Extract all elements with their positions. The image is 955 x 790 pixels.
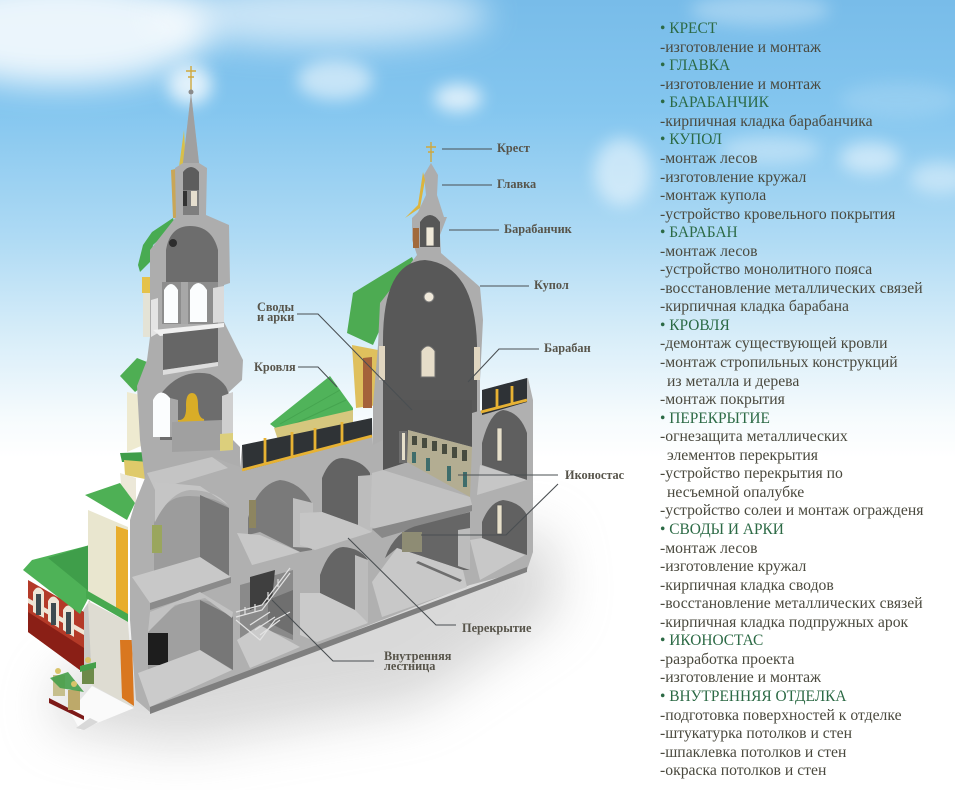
section: перекрытие: -огнезащита металлических [660, 428, 848, 445]
callout: кровля [254, 360, 337, 387]
section: купол [660, 131, 895, 223]
entrance steps and gate [49, 657, 134, 730]
annex windows [33, 588, 74, 637]
callout: барабанчик: Барабанчик [504, 222, 573, 236]
section: своды и арки: -изготовление кружал [660, 558, 806, 575]
section: кровля: -монтаж стропильных конструкций [660, 354, 898, 371]
section wall mass [130, 378, 533, 712]
section: перекрытие [660, 410, 924, 519]
dome grey shell [373, 163, 483, 445]
top room 3 [322, 458, 370, 527]
callout: внутренняя лестница [272, 600, 452, 673]
callout: иконостас: Иконостас [565, 468, 625, 482]
callout: барабанчик [449, 222, 573, 236]
yellow trusses [242, 386, 527, 470]
tower section walls [137, 93, 243, 480]
section: перекрытие: элементов перекрытия [667, 447, 818, 464]
section: иконостас: -разработка проекта [660, 651, 794, 668]
callout: барабан: Барабан [544, 341, 591, 355]
top room 1 [154, 496, 229, 583]
callout: своды и арки [257, 300, 412, 410]
section: перекрытие: несъемной опалубке [667, 484, 804, 501]
church section body [85, 378, 533, 714]
section: купол: -изготовление кружал [660, 169, 806, 186]
bell tier base [172, 420, 222, 452]
ground room 1 [148, 600, 233, 675]
section: крест: -изготовление и монтаж [660, 39, 821, 56]
section: перекрытие: -устройство солеи и монтаж огражденя [660, 502, 924, 519]
ground shadow [50, 530, 560, 745]
section: внутренняя отделка: -окраска потолков и стен [660, 762, 827, 779]
iconostasis [407, 430, 472, 497]
top terrace [147, 457, 228, 490]
section: своды и арки: -кирпичная кладка сводов [660, 577, 834, 594]
round window [424, 292, 434, 302]
bell tower [120, 66, 243, 503]
belfry interior [166, 226, 218, 284]
section: барабан: • БАРАБАН [660, 224, 738, 241]
work list [660, 20, 924, 779]
section: своды и арки: -восстановление металлических связей [660, 595, 923, 612]
side facade [88, 510, 128, 620]
callout: барабан [468, 341, 591, 382]
top drum interior [183, 167, 199, 190]
dome windows [421, 346, 435, 377]
slab edge [150, 567, 527, 714]
dome interior [383, 260, 477, 420]
section: барабан: -устройство монолитного пояса [660, 261, 872, 278]
callout: своды и арки: Своды [257, 300, 294, 314]
section: внутренняя отделка: -штукатурка потолков и стен [660, 725, 853, 742]
gallery upper roofs [242, 418, 372, 471]
section: главка: -изготовление и монтаж [660, 76, 821, 93]
section: главка [660, 57, 821, 93]
spire highlight [183, 93, 199, 163]
callout: иконостас [421, 468, 625, 535]
section: иконостас [660, 632, 821, 686]
ground room 4 [385, 512, 470, 570]
section: перекрытие: -устройство перекрытия по [660, 465, 843, 482]
section: барабанчик: • БАРАБАНЧИК [660, 94, 770, 111]
callout: главка [442, 177, 536, 191]
section: купол: • КУПОЛ [660, 131, 722, 148]
callout: внутренняя лестница: лестница [384, 659, 435, 673]
section: иконостас: • ИКОНОСТАС [660, 632, 763, 649]
ground room 5 [482, 500, 527, 555]
callout: своды и арки: и арки [257, 310, 294, 324]
section: купол: -монтаж купола [660, 187, 766, 204]
tower trim [179, 130, 186, 167]
section: перекрытие: • ПЕРЕКРЫТИЕ [660, 410, 770, 427]
section: своды и арки [660, 521, 923, 631]
callout: крест: Крест [497, 141, 530, 155]
callout: перекрытие: Перекрытие [462, 621, 532, 635]
section: барабан [660, 224, 923, 315]
callout: кровля: Кровля [254, 360, 296, 374]
section: барабанчик: -кирпичная кладка барабанчика [660, 113, 873, 130]
callout: купол: Купол [534, 278, 569, 292]
nave wall [383, 400, 472, 470]
callout: перекрытие [348, 538, 532, 635]
section: кровля: из металла и дерева [667, 373, 799, 390]
belfry arch openings [164, 284, 178, 323]
section: барабанчик [660, 94, 873, 130]
drum and dome [347, 142, 483, 445]
top room 2 [248, 480, 312, 552]
section: кровля: • КРОВЛЯ [660, 317, 730, 334]
annex red wall [28, 580, 84, 673]
section: барабан: -восстановление металлических связей [660, 280, 923, 297]
annex wall between [82, 600, 92, 680]
bell [178, 393, 204, 423]
clouds [0, 0, 955, 206]
top lantern [420, 215, 440, 247]
section: крест [660, 20, 821, 56]
cross on dome [426, 142, 436, 162]
right upper room [482, 410, 527, 480]
callout: главка: Главка [497, 177, 536, 191]
nave floor [370, 470, 472, 530]
section: внутренняя отделка: -подготовка поверхностей к отделке [660, 707, 902, 724]
section: купол: -монтаж лесов [660, 150, 758, 167]
section: купол: -устройство кровельного покрытия [660, 206, 895, 223]
section: кровля: -монтаж покрытия [660, 391, 785, 408]
lower belfry interior [160, 373, 228, 440]
annex roof [23, 545, 91, 614]
section: своды и арки: -монтаж лесов [660, 540, 758, 557]
section: барабан: -кирпичная кладка барабана [660, 298, 849, 315]
stair well room [240, 570, 293, 640]
section: крест: • КРЕСТ [660, 20, 718, 37]
annex building with green roof [23, 545, 92, 680]
section: главка: • ГЛАВКА [660, 57, 730, 74]
section: кровля [660, 317, 898, 408]
section: барабан: -монтаж лесов [660, 243, 758, 260]
callouts [254, 141, 625, 673]
section: внутренняя отделка: • ВНУТРЕННЯЯ ОТДЕЛКА [660, 688, 847, 705]
main roof [270, 376, 353, 440]
dome outer green [347, 257, 415, 345]
internal stairs [236, 568, 290, 640]
section: внутренняя отделка: -шпаклевка потолков и стен [660, 744, 847, 761]
section: своды и арки: • СВОДЫ И АРКИ [660, 521, 784, 538]
belfry floor [153, 323, 224, 336]
callout: крест [442, 141, 530, 155]
ground room 3 [320, 547, 368, 623]
drum yellow side [352, 345, 378, 408]
callout: купол [480, 278, 569, 292]
callout: внутренняя лестница: Внутренняя [384, 649, 452, 663]
cross on tower [186, 66, 196, 90]
section: своды и арки: -кирпичная кладка подпружных арок [660, 614, 909, 631]
middle tier interior [163, 328, 218, 370]
section: внутренняя отделка [660, 688, 902, 779]
section: кровля: -демонтаж существующей кровли [660, 335, 888, 352]
section: иконостас: -изготовление и монтаж [660, 669, 821, 686]
